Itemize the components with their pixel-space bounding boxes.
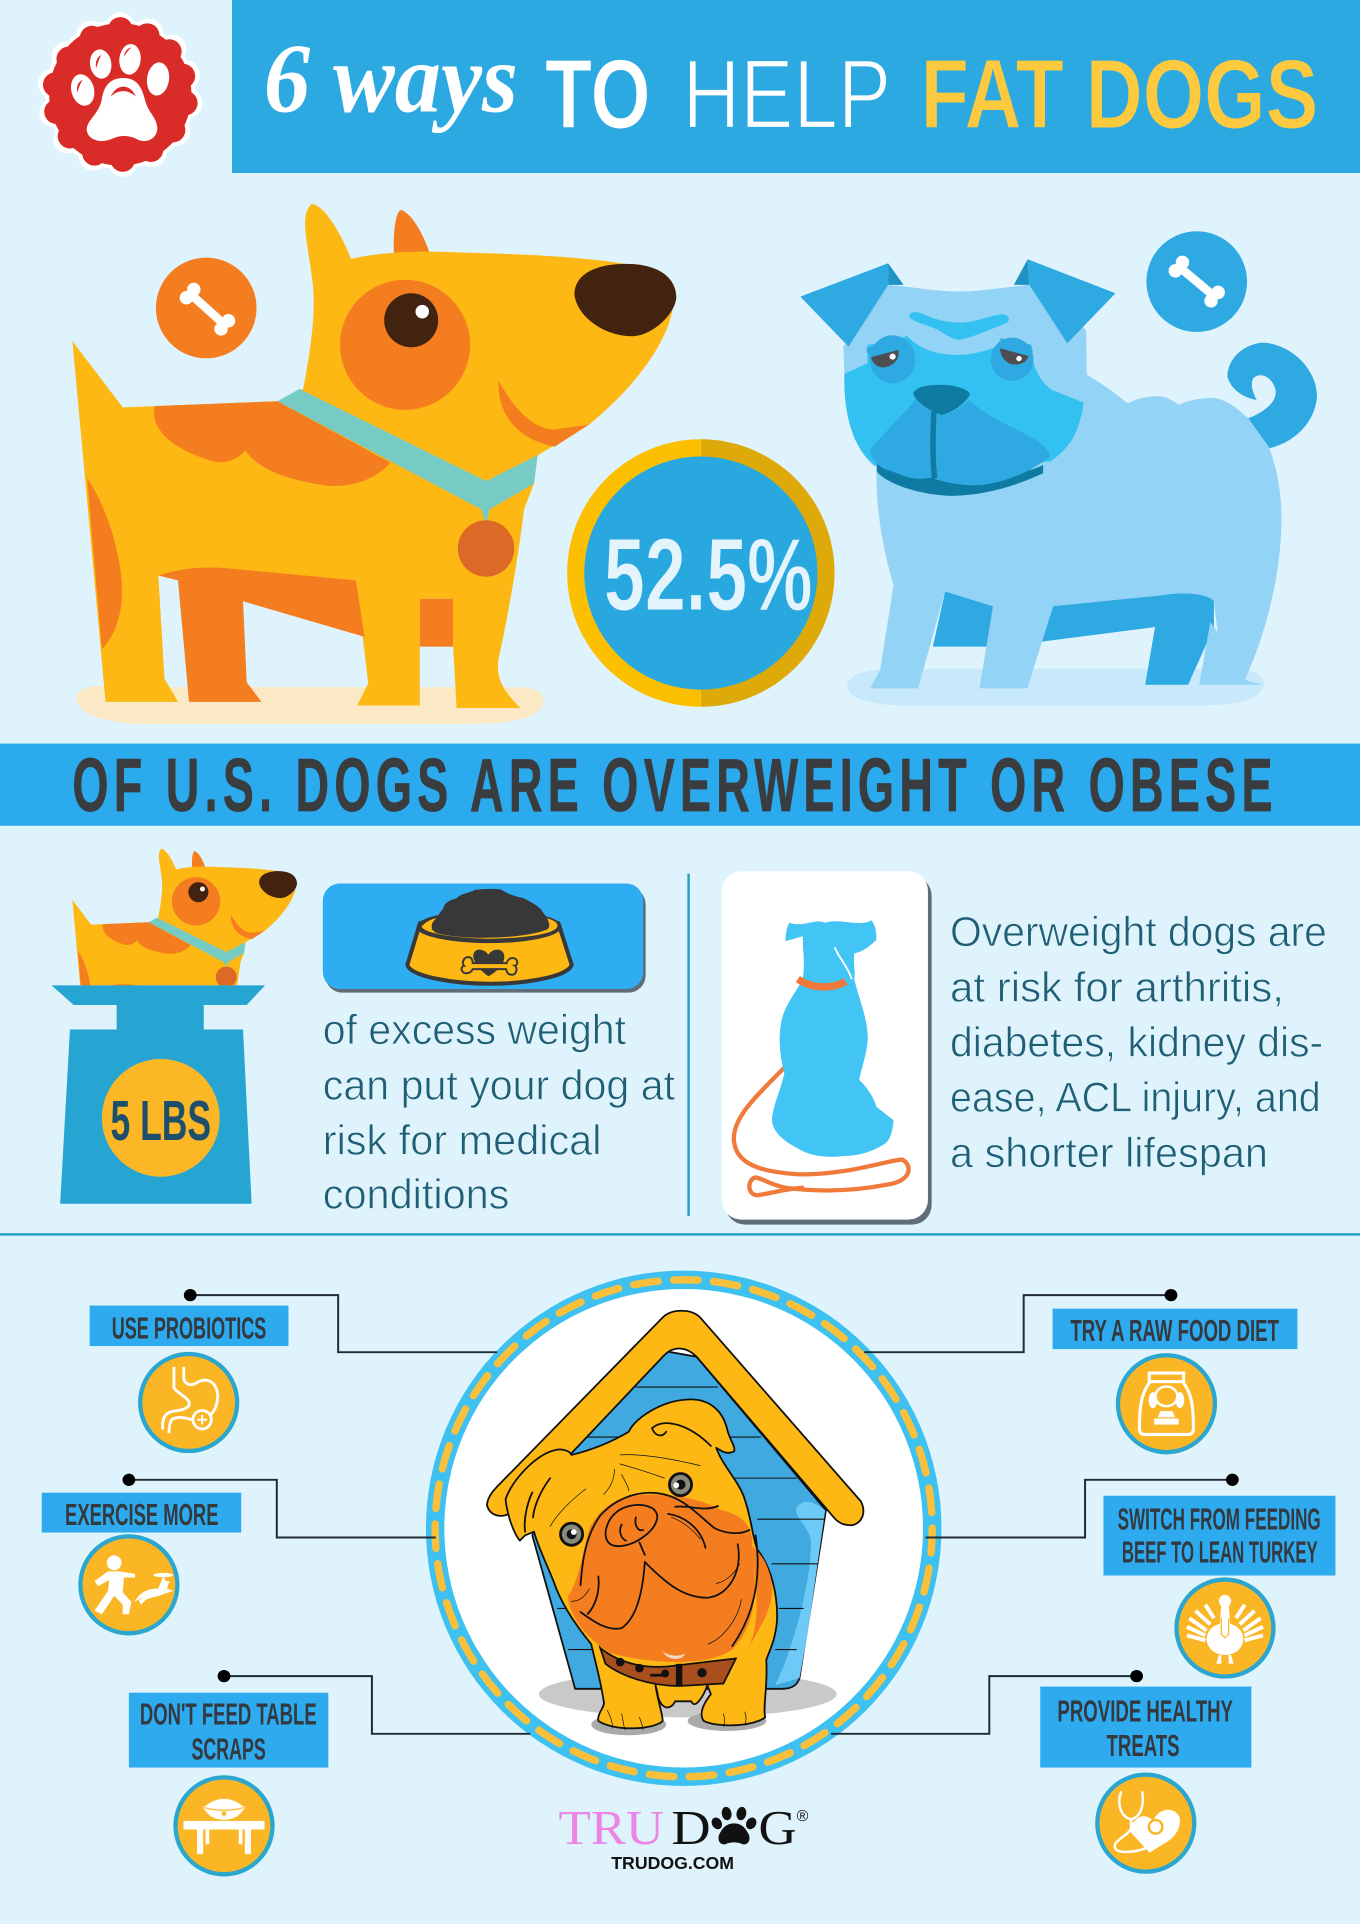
scale [52, 985, 265, 1204]
roof [487, 1311, 863, 1525]
bulldog body [506, 1399, 777, 1728]
logo: TruDog: TRU [558, 1800, 664, 1855]
badge: red paw [38, 12, 203, 177]
pug face [844, 336, 1084, 465]
dog nose [574, 264, 676, 336]
pug far legs [933, 591, 1214, 685]
connector lines [122, 1289, 1239, 1734]
icon: logo paw [710, 1806, 759, 1844]
text: risks: a shorter lifespan [950, 1129, 1268, 1176]
header banner [232, 0, 1360, 173]
dog collar [277, 389, 538, 525]
tip: healthy treats: PROVIDE HEALTHY [1057, 1694, 1233, 1729]
tip: exercise more: EXERCISE MORE [65, 1497, 218, 1532]
logo: TruDog: G [759, 1800, 797, 1855]
icon: table with bowl [176, 1777, 272, 1874]
dog eye [340, 280, 470, 410]
tip: lean turkey [1103, 1496, 1335, 1677]
dog body [72, 204, 673, 708]
logo: TruDog: D [671, 1800, 711, 1855]
title: HELP [682, 39, 891, 149]
text: risks: ease, ACL injury, and [950, 1074, 1321, 1121]
card: sitting dog [722, 871, 932, 1225]
title: 6 ways [264, 26, 518, 134]
pug head [800, 259, 1115, 496]
tip: healthy treats [1040, 1687, 1251, 1872]
pug body [870, 294, 1281, 688]
text: excess weight [323, 1006, 675, 1218]
bulldog lines [525, 1423, 758, 1646]
leash [734, 1068, 909, 1195]
icon: stomach [140, 1354, 237, 1451]
text: risks: at risk for arthritis, [950, 963, 1284, 1010]
pug muzzle [871, 400, 1050, 485]
dog shadow [76, 686, 543, 724]
small dog [72, 848, 297, 986]
weight label [102, 1059, 220, 1177]
bulldog belly highlight [663, 1651, 685, 1659]
text: excess weight: can put your dog at [323, 1061, 675, 1108]
weight label: 5 LBS [110, 1089, 211, 1152]
icon: orange bone [156, 258, 257, 358]
tip: use probiotics [90, 1306, 288, 1451]
dog hind legs [158, 568, 365, 702]
icon: turkey [1176, 1580, 1273, 1677]
central bulldog medallion [426, 1271, 941, 1786]
icon: blue bone [1146, 231, 1247, 332]
icon: heart and stethoscope [1097, 1775, 1194, 1872]
title [264, 26, 1318, 149]
dog far ear [394, 210, 431, 258]
logo: TruDog: TRUDOG.COM [611, 1853, 734, 1873]
bulldog in doghouse [487, 1311, 863, 1735]
icon: food bag [1118, 1355, 1215, 1452]
text: excess weight: conditions [323, 1171, 509, 1218]
dog mouth [498, 380, 589, 447]
small dog on scale [52, 849, 297, 1204]
tip: table scraps: DON'T FEED TABLE [140, 1697, 317, 1732]
logo: TruDog: ® [797, 1808, 809, 1825]
pug brow [909, 312, 1009, 340]
icon: bowl [407, 889, 572, 984]
bulldog muzzle [568, 1494, 755, 1662]
icon: person and dog [80, 1536, 177, 1633]
card: food bowl [323, 883, 646, 993]
pug tail [1227, 343, 1317, 448]
orange dog [72, 204, 676, 724]
blue pug [800, 259, 1317, 706]
bulldog eyes [559, 1472, 693, 1547]
pug eyes [870, 335, 915, 383]
tip: use probiotics: USE PROBIOTICS [112, 1311, 266, 1346]
dog patches [154, 401, 390, 486]
bulldog collar [600, 1648, 736, 1686]
ground shadow [539, 1671, 837, 1717]
tip: table scraps [129, 1693, 328, 1874]
tip: table scraps: SCRAPS [191, 1732, 266, 1767]
logo: TruDog [558, 1800, 809, 1873]
stat circle: 52.5%: 52.5% [604, 517, 813, 632]
text: risks [950, 908, 1327, 1176]
tip: healthy treats: TREATS [1107, 1728, 1180, 1763]
tip: exercise more [42, 1493, 241, 1633]
pug nose [913, 385, 970, 415]
text: risks: diabetes, kidney dis- [950, 1018, 1323, 1065]
pug chin [877, 464, 1043, 496]
dog tag [458, 520, 514, 577]
stat circle: 52.5% [567, 439, 835, 707]
dog silhouette [772, 920, 894, 1157]
text: excess weight: of excess weight [323, 1006, 626, 1053]
pug shadow [847, 669, 1264, 706]
dog collar [798, 979, 846, 987]
doghouse [532, 1351, 826, 1689]
text: excess weight: risk for medical [323, 1117, 601, 1164]
tip: raw food diet [1053, 1309, 1297, 1452]
text: risks: Overweight dogs are [950, 908, 1327, 955]
pug ears [888, 259, 1029, 285]
title: TO [545, 39, 651, 149]
